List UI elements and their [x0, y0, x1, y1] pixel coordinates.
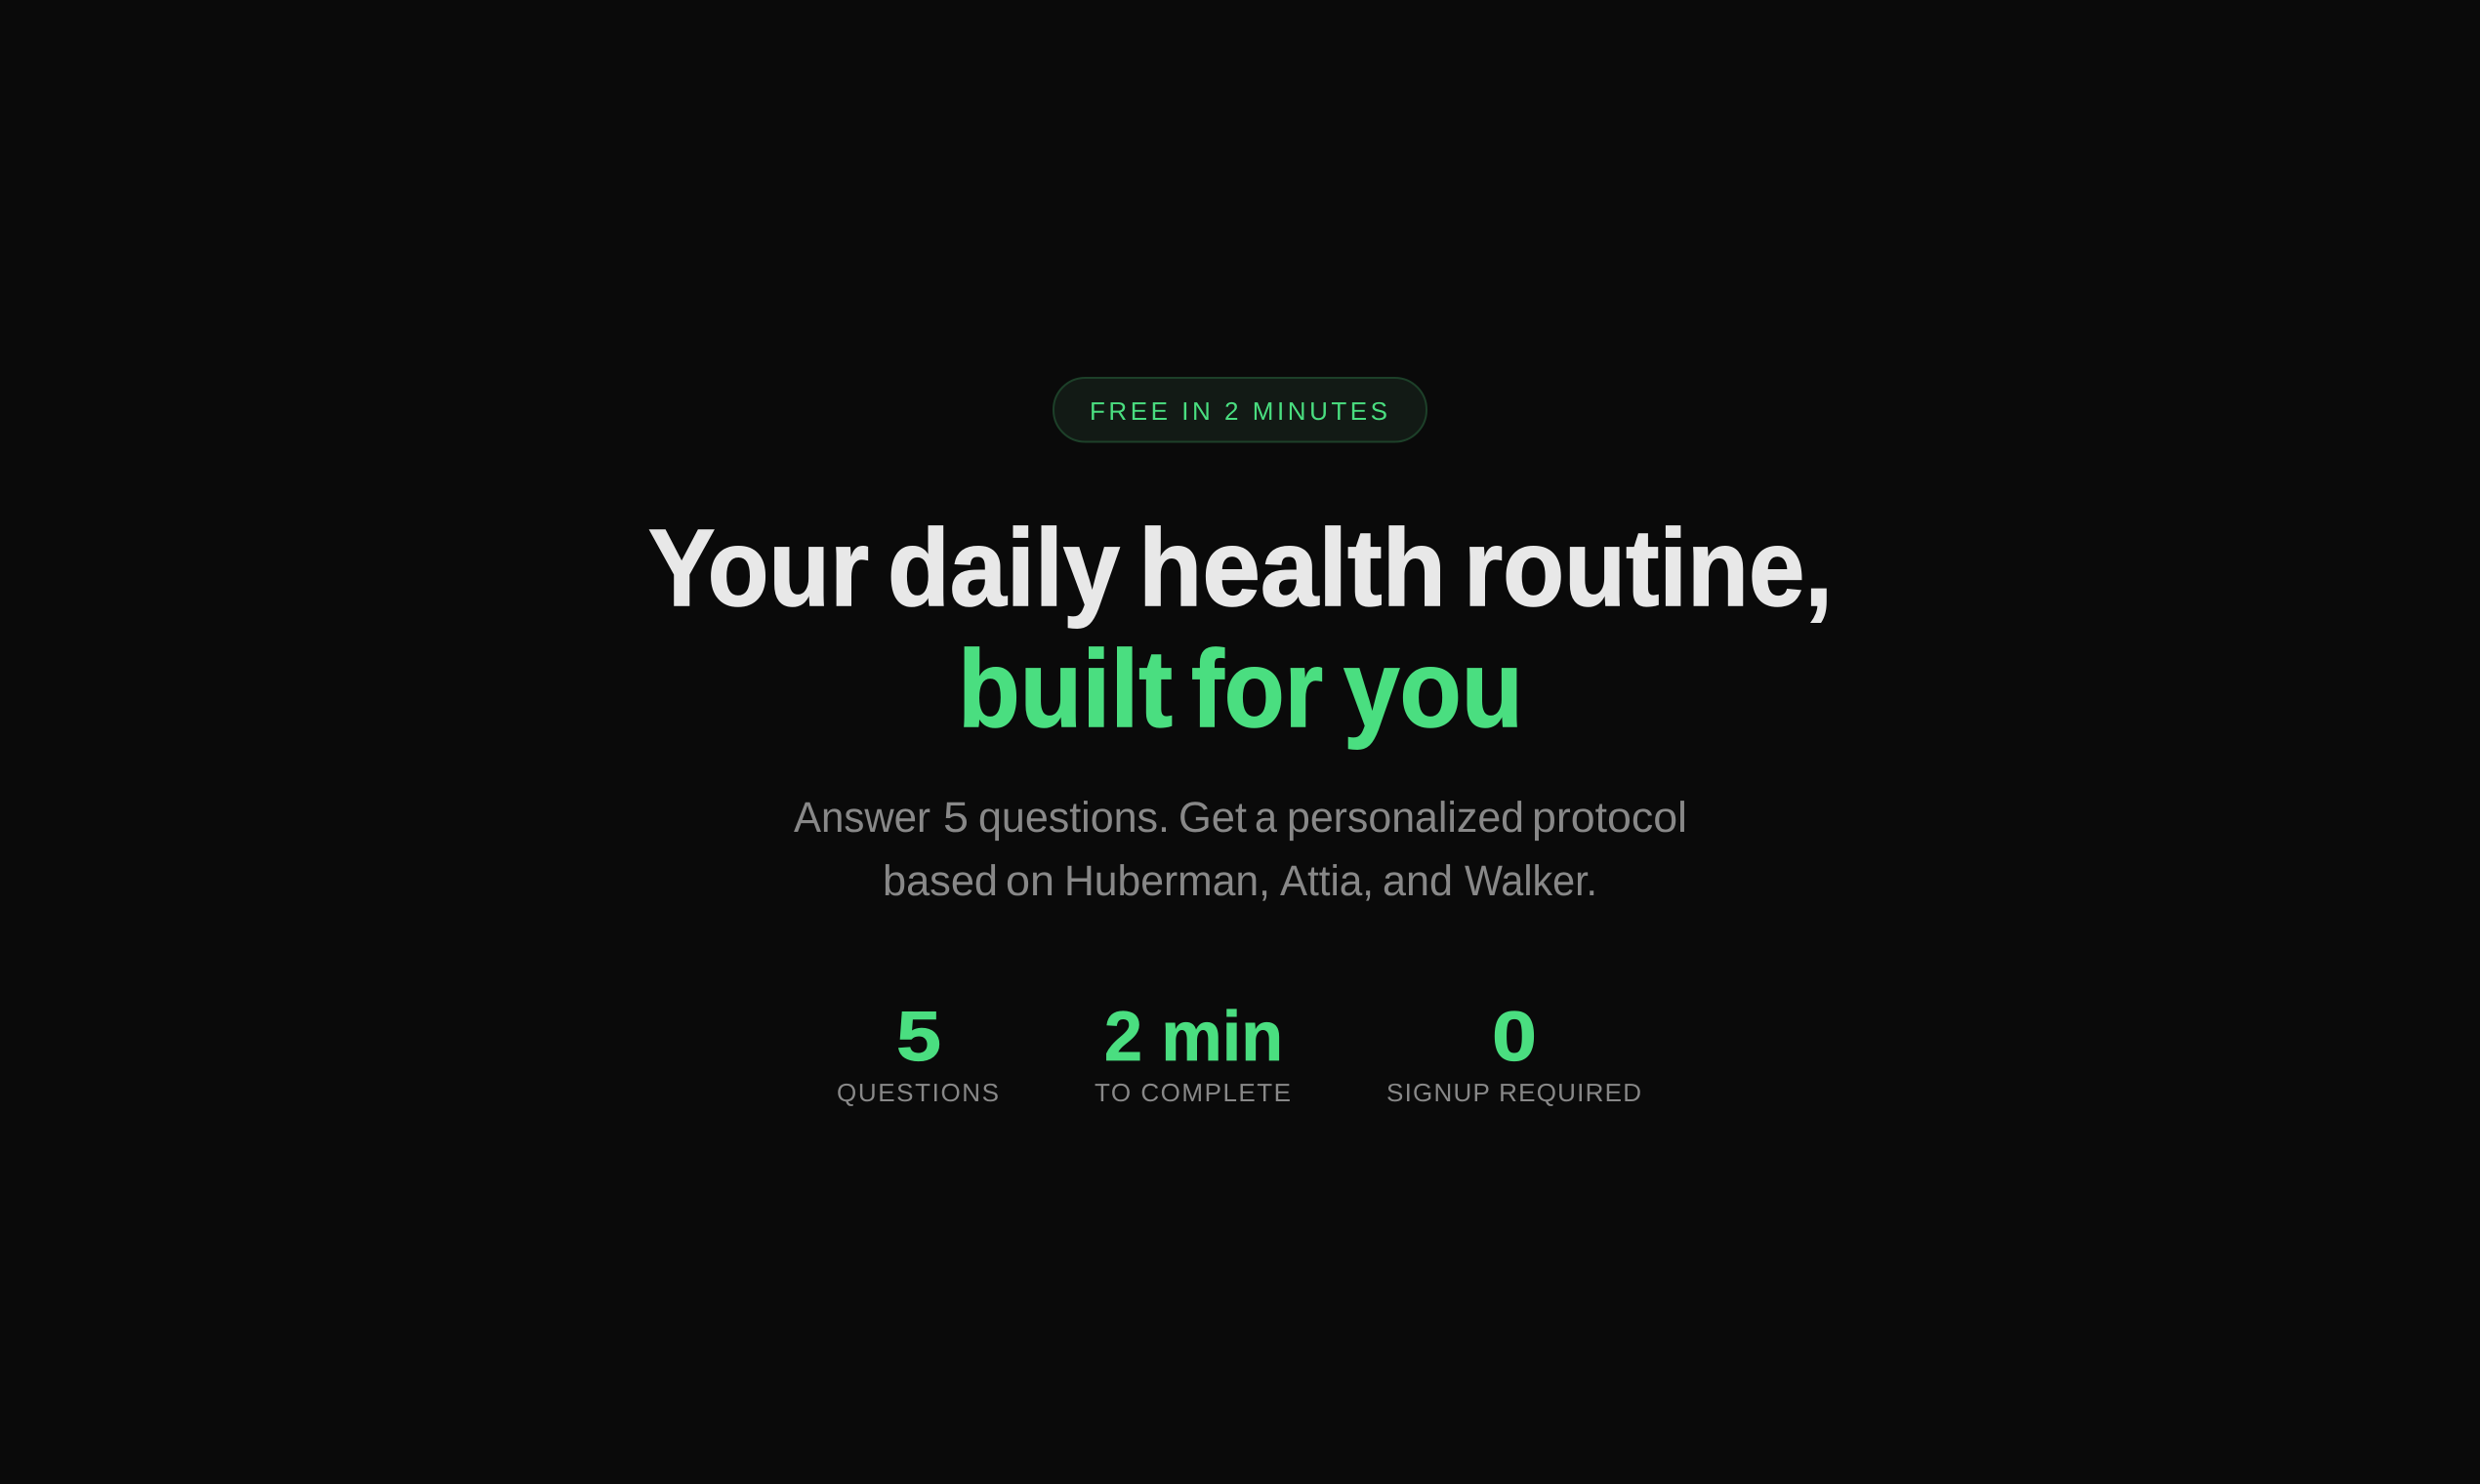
- stat: 2 min to complete: [1095, 998, 1291, 1107]
- subtitle: based: [883, 857, 998, 905]
- title line 1: daily: [888, 507, 1120, 629]
- title line 1: routine,: [1464, 507, 1833, 629]
- title line 2 highlighted: for: [1191, 628, 1323, 750]
- subtitle: Huberman,: [1064, 857, 1270, 905]
- stat: 2 min to complete: 2 min: [1104, 998, 1283, 1076]
- title line 1: Your: [648, 507, 869, 629]
- stat: 2 min to complete: TO COMPLETE: [1095, 1078, 1291, 1107]
- title line 2 highlighted: built: [958, 628, 1173, 750]
- subtitle: on: [1006, 857, 1054, 905]
- subtitle: a: [1255, 794, 1277, 842]
- badge: free in 2 minutes: [1054, 378, 1426, 441]
- subtitle: questions.: [978, 794, 1170, 842]
- title line 1: [648, 507, 1833, 629]
- subtitle: personalized: [1287, 794, 1524, 842]
- stat: 0 signup required: [1386, 998, 1641, 1107]
- stat: 0 signup required: SIGNUP REQUIRED: [1386, 1078, 1641, 1107]
- stat: 5 questions: 5: [896, 998, 941, 1076]
- title line 2 highlighted: you: [1343, 628, 1523, 750]
- title: [648, 507, 1833, 750]
- subtitle: Walker.: [1465, 857, 1597, 905]
- subtitle: [794, 794, 1687, 905]
- subtitle: Attia,: [1280, 857, 1374, 905]
- subtitle: and: [1383, 857, 1453, 905]
- subtitle: 5: [943, 794, 969, 842]
- badge: free in 2 minutes: FREE IN 2 MINUTES: [1090, 396, 1387, 426]
- subtitle: protocol: [1532, 794, 1687, 842]
- subtitle: Answer: [794, 794, 930, 842]
- stat: 5 questions: [837, 998, 999, 1107]
- subtitle: Get: [1178, 794, 1247, 842]
- stat: 5 questions: QUESTIONS: [837, 1078, 999, 1107]
- stat: 0 signup required: 0: [1492, 998, 1537, 1076]
- title line 2 highlighted: [958, 628, 1523, 750]
- title line 1: health: [1138, 507, 1446, 629]
